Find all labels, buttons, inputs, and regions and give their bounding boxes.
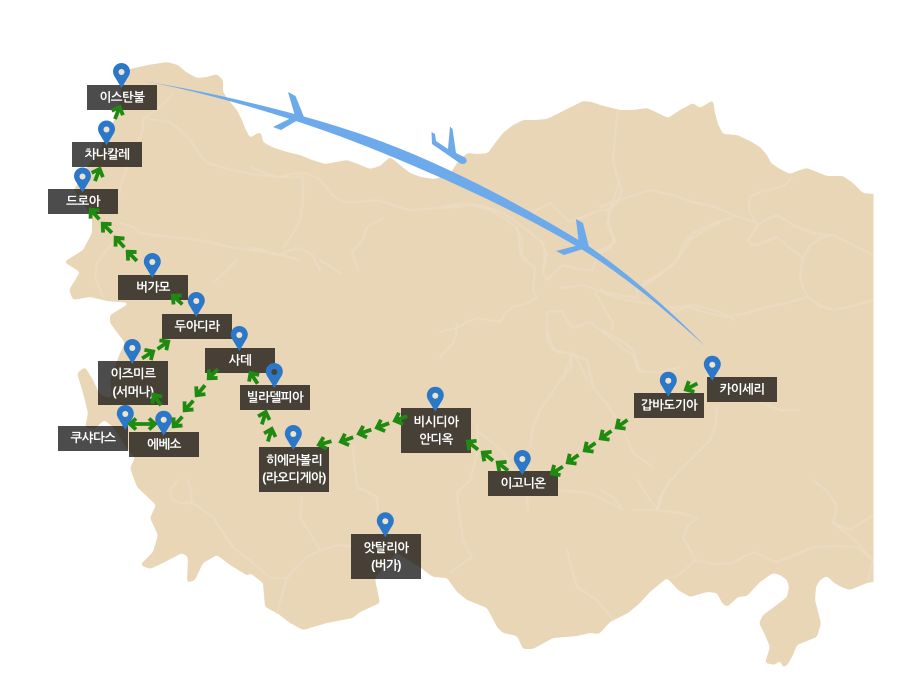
label: 카이세리 [707,377,777,402]
label: 이고니온 [488,471,558,496]
pin: 두아디라 [188,292,205,317]
arrow: 두아디라 to 버가모 [169,291,186,309]
green route arrows [86,105,700,479]
label: 차나칼레: 차나칼레 [84,148,130,162]
arrow: 차나칼레 to 이스탄불 [109,105,125,121]
pin: 사데 [231,326,248,351]
label: 에베소 [129,432,199,457]
pin: 버가모 [144,253,161,278]
label: 카이세리: 카이세리 [719,382,765,396]
label: 히에라볼리 (라오디게아): 히에라볼리 [266,454,322,468]
arrow: 버가모 to 드로아 3 [111,234,129,251]
arrow: 갑바도기아 to 이고니온 3 [581,438,599,455]
arrow: 버가모 to 드로아 2 [98,219,116,237]
pin: 앗탈리아 [377,512,394,537]
arrow: 사데 to 에베소 2 [192,381,210,399]
pin: 히에라볼리 [285,425,302,450]
arrow: 에베소 to 이즈미르 [149,391,166,409]
label: 사데: 사데 [229,354,251,368]
arrow: 버가모 to 드로아 4 [123,247,141,265]
pin: 차나칼레 [98,120,115,146]
icon: plane wing marker 2 [556,219,589,255]
flight path arrow [143,81,705,346]
icon: plane wing marker 1 [273,92,304,130]
pin: 쿠샤다스 [117,405,134,430]
label: 이고니온: 이고니온 [500,476,546,490]
provincial border lines [95,93,873,620]
pin: 에베소 [155,411,172,436]
arrow: 갑바도기아 to 이고니온 4 [597,426,615,443]
label: 갑바도기아 [634,393,704,418]
arrow: 갑바도기아 to 이고니온 2 [564,450,582,467]
arrow: 비시디아 to 히에라볼리 2 [339,432,355,447]
label: 비시디아 안디옥: 안디옥 [419,432,454,446]
label: 앗탈리아 (버가) [351,534,421,579]
label: 쿠샤다스: 쿠샤다스 [70,431,116,445]
label: 이즈미르 (서머나): (서머나) [112,385,154,399]
label: 버가모: 버가모 [136,280,171,294]
label: 쿠샤다스 [58,426,128,451]
arrow: 갑바도기아 to 이고니온 5 [613,415,631,432]
arrow: 버가모 to 드로아 1 [86,206,104,223]
label: 비시디아 안디옥: 비시디아 [413,415,459,429]
label: 빌라델피아: 빌라델피아 [247,390,304,404]
pin: 갑바도기아 [660,372,677,397]
arrow: 이고니온 to 비시디아 2 [479,448,497,465]
label: 이즈미르 (서머나) [98,361,168,405]
label: 이스탄불: 이스탄불 [99,90,145,104]
label: 에베소: 에베소 [147,438,182,452]
pin: 비시디아 [427,387,444,412]
label: 히에라볼리 (라오디게아) [259,447,329,492]
label: 드로아 [48,189,118,214]
label: 앗탈리아 (버가): 앗탈리아 [363,541,409,555]
label: 이스탄불 [87,85,157,110]
arrow: 이고니온 to 비시디아 1 [464,437,482,454]
pin: 빌라델피아 [266,363,283,388]
pin: 이즈미르 [124,339,141,364]
arrow: 비시디아 to 히에라볼리 3 [357,424,373,439]
route map of Turkey [48,62,874,666]
label: 히에라볼리 (라오디게아): (라오디게아) [262,471,326,485]
arrow: 비시디아 to 히에라볼리 1 [317,435,333,450]
arrow: 사데 to 에베소 1 [204,365,222,383]
arrow: 사데 to 에베소 3 [180,397,198,414]
arrow: 히에라볼리 to 빌라델피아 1 [256,410,271,426]
arrow: 드로아 to 차나칼레 [89,167,105,183]
pin: 이고니온 [514,450,531,475]
label: 드로아: 드로아 [66,194,101,208]
arrow: 이고니온 to 비시디아 3 [494,458,512,475]
arrow: 빌라델피아 to 사데 [246,370,263,387]
label: 앗탈리아 (버가): (버가) [371,558,401,572]
arrow: 비시디아 to 히에라볼리 5 [393,411,409,426]
label: 두아디라 [162,314,232,339]
label: 이즈미르 (서머나): 이즈미르 [110,367,156,381]
pin: 드로아 [74,168,91,192]
label: 빌라델피아 [240,385,310,410]
arrow: 카이세리 to 갑바도기아 [683,378,700,395]
arrow: 히에라볼리 to 빌라델피아 2 [262,427,277,443]
label: 버가모 [118,275,188,300]
arrow: 이즈미르 to 두아디라 2 [139,346,156,364]
icon: airplane tail [432,126,467,164]
arrow: 이즈미르 to 두아디라 1 [154,337,172,354]
arrow: 사데 to 에베소 4 [169,413,187,430]
arrow: 쿠샤다스 and 에베소 double [130,418,155,430]
land map [64,62,890,668]
arrow: 비시디아 to 히에라볼리 4 [375,418,391,433]
label: 사데 [205,348,275,373]
label: 두아디라: 두아디라 [174,320,220,334]
label: 비시디아 안디옥 [401,408,471,453]
pin: 카이세리 [704,356,721,381]
arrow: 갑바도기아 to 이고니온 1 [549,461,566,479]
pin: 이스탄불 [113,63,130,88]
label: 갑바도기아: 갑바도기아 [641,398,698,412]
label: 차나칼레 [72,142,142,167]
